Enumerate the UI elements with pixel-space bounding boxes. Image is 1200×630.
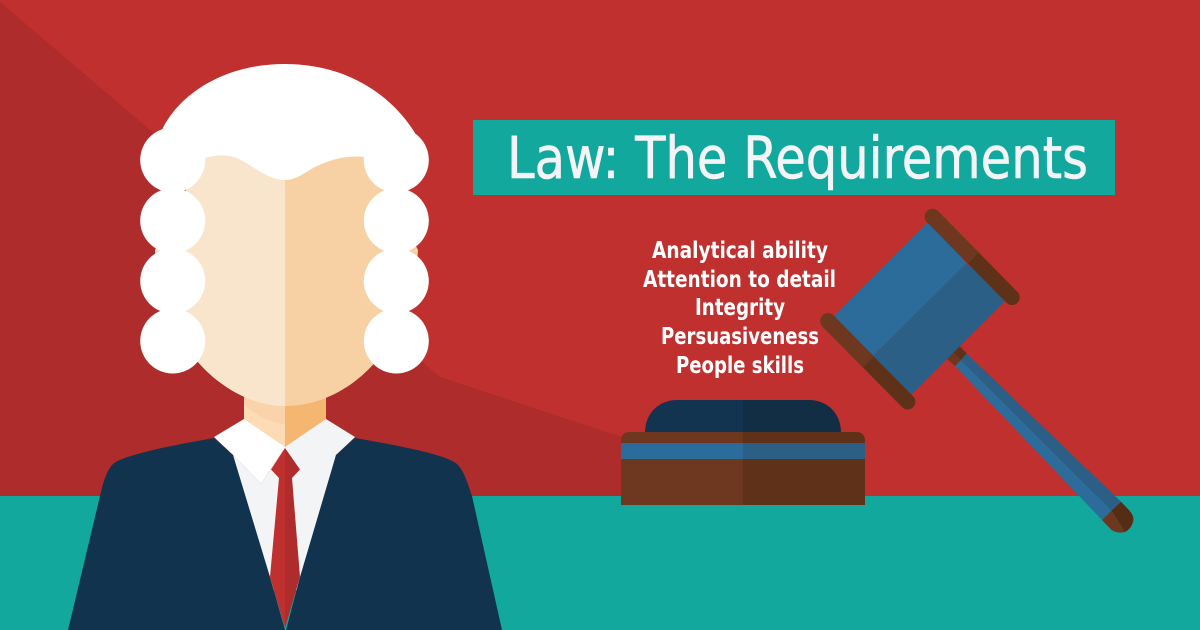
title: Law: The Requirements: [507, 124, 1088, 192]
icon: judge figure: [68, 64, 502, 630]
judge neck: [244, 395, 326, 450]
requirements list: People skills: [676, 353, 804, 379]
icon: gavel: [824, 213, 1133, 533]
requirements list: Integrity: [695, 295, 785, 321]
icon: sound block: [621, 400, 865, 505]
judge shirt: [233, 447, 336, 590]
gavel head: [830, 220, 1008, 398]
judge collar: [214, 419, 355, 484]
requirements list: Attention to detail: [643, 267, 836, 293]
gavel handle: [955, 353, 1121, 520]
background: teal floor: [0, 496, 1200, 630]
requirements list: [643, 238, 836, 379]
sound block base: [621, 432, 865, 505]
gavel bottom band: [824, 317, 908, 402]
judge wig: [140, 64, 429, 374]
judge tie: [270, 448, 300, 628]
judge suit: [68, 438, 502, 630]
title banner: [473, 120, 1115, 195]
requirements list: Persuasiveness: [661, 324, 819, 350]
gavel handle end cap: [1102, 502, 1133, 533]
judge face: [155, 150, 418, 406]
requirements list: Analytical ability: [652, 238, 828, 264]
gavel top band: [929, 213, 1012, 297]
gavel collar: [947, 346, 966, 366]
sound block dome: [645, 400, 841, 433]
background: dark red shadow: [0, 2, 625, 496]
